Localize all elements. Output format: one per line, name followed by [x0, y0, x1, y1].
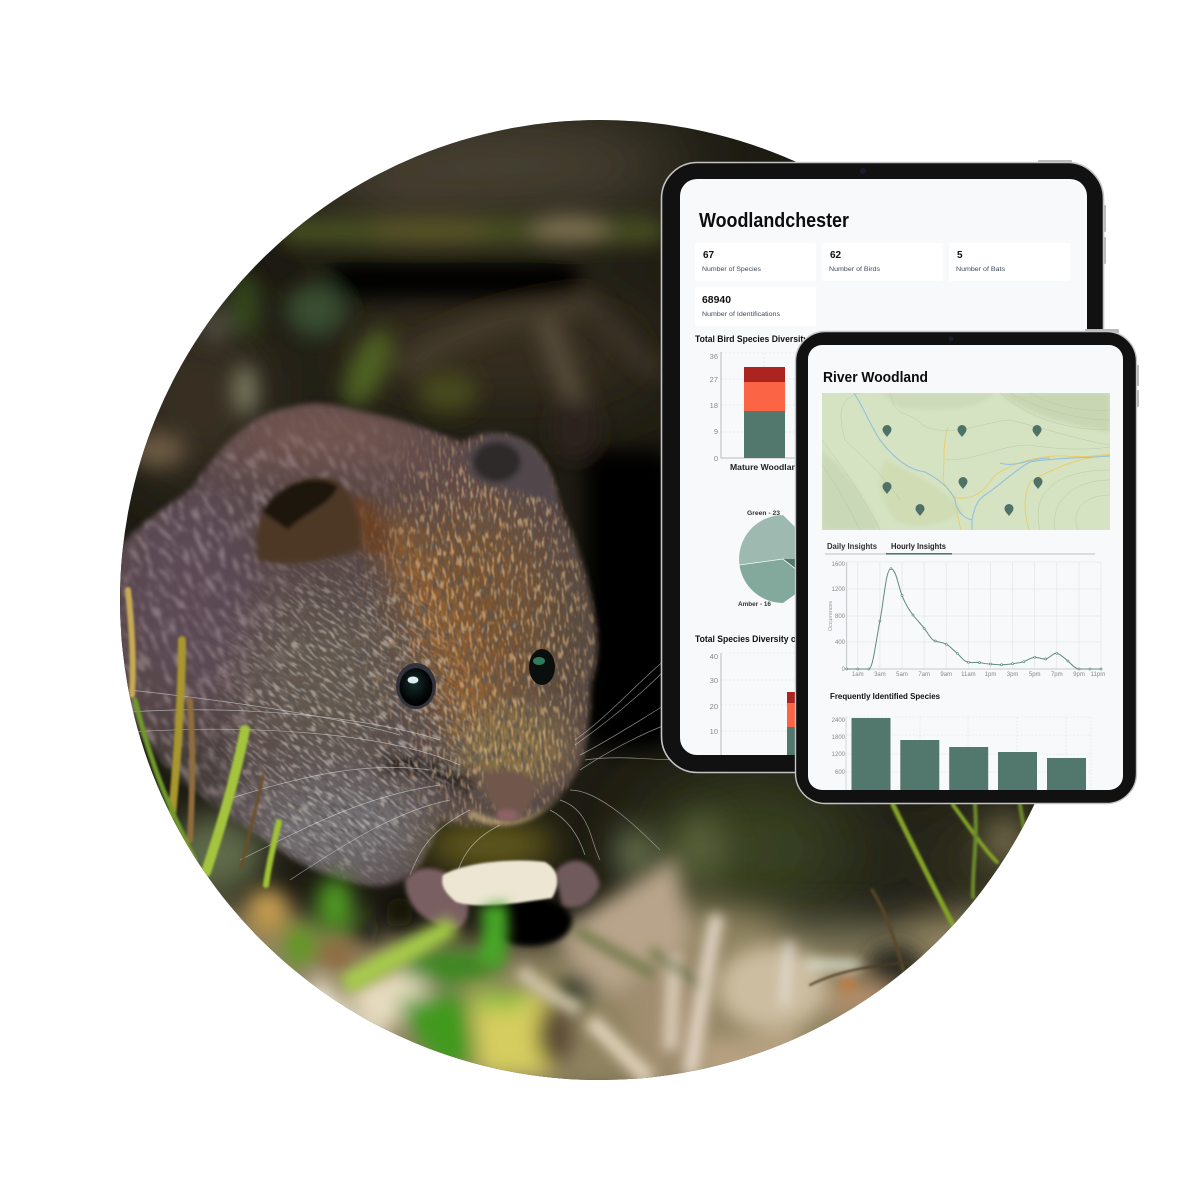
stat card: birds [830, 251, 880, 271]
line chart: hourly occurrences: 1200 [832, 587, 846, 593]
line chart: hourly occurrences: 0 [842, 667, 846, 673]
photo: bank vole in a circle [120, 120, 1034, 1080]
foreground grass and stalks [128, 590, 1025, 1080]
bar chart: frequently identified species: 600 [835, 770, 846, 776]
pie chart: species by status: Amber - 16 [738, 601, 771, 608]
bar chart: frequently identified species: 1800 [832, 735, 846, 741]
tabs: daily and hourly insights: Daily Insights [827, 542, 878, 551]
line chart: hourly occurrences: 11pm [1091, 672, 1105, 678]
mouse body [120, 400, 670, 890]
stat card: birds: Number of Birds [829, 266, 881, 273]
food and paws [405, 861, 600, 946]
stacked bar chart: bird species [710, 352, 802, 472]
stacked bar chart: all species [710, 652, 795, 755]
stat card: species [702, 251, 761, 272]
fur: cheek strands [204, 549, 485, 884]
stacked bar chart: bird species: 0 [714, 454, 718, 463]
stat card: identifications [702, 296, 780, 316]
pie chart: species by status: Green - 23 [747, 510, 780, 517]
line chart: hourly occurrences: 7pm [1051, 672, 1063, 678]
stacked bar chart: all species: 30 [710, 676, 718, 685]
background foliage, blurred [130, 123, 1040, 920]
stat card: birds: 62 [830, 250, 842, 261]
nose [482, 771, 535, 822]
line chart: hourly occurrences: 1pm [985, 672, 996, 678]
muzzle [470, 800, 565, 824]
bar chart: frequently identified species: 1200 [832, 752, 846, 758]
pie chart: species by status [738, 510, 795, 606]
near eye [396, 663, 436, 709]
line chart: hourly occurrences: 9am [940, 672, 952, 678]
foreground base: blurred leaf litter [216, 804, 1029, 1080]
stacked bar chart: bird species: 36 [710, 352, 718, 361]
stat card: bats: 5 [957, 250, 963, 261]
line chart: hourly occurrences: 3pm [1007, 672, 1018, 678]
heading: Woodlandchester: Woodlandchester [699, 210, 849, 232]
tablet side buttons [1085, 329, 1139, 407]
map with site pins [822, 393, 1110, 530]
tabs: daily and hourly insights: Hourly Insights [891, 542, 947, 551]
bar chart: frequently identified species: 2400 [832, 718, 846, 724]
stat card: bats [956, 251, 1005, 271]
stacked bar chart: all species: 10 [710, 727, 718, 736]
line chart: hourly occurrences: 1am [852, 672, 864, 678]
line chart: hourly occurrences: 7am [918, 672, 930, 678]
stacked bar chart: bird species: Mature Woodland [730, 463, 802, 472]
stat card: identifications: Number of Identifications [702, 311, 781, 318]
heading: River Woodland: River Woodland [823, 369, 928, 386]
fur: soft body [120, 426, 400, 841]
tablet: River Woodland dashboard [796, 329, 1139, 804]
far eye [529, 649, 555, 685]
heading: bird species diversity: Total Bird Species Diversity [695, 334, 809, 345]
line chart: hourly occurrences: 1600 [832, 562, 846, 568]
tabs: daily and hourly insights [825, 542, 1095, 555]
whiskers [130, 660, 680, 880]
infographic canvas [120, 120, 1139, 1080]
near ear [256, 477, 360, 564]
line chart: hourly occurrences: 400 [835, 640, 846, 646]
line chart: hourly occurrences: 9pm [1073, 672, 1085, 678]
stacked bar chart: bird species: 27 [710, 375, 718, 384]
line chart: hourly occurrences: 5am [896, 672, 908, 678]
stacked bar chart: all species: 40 [710, 652, 718, 661]
stat card: identifications: 68940 [702, 295, 731, 306]
far ear [464, 436, 556, 505]
line chart: hourly occurrences [828, 562, 1105, 678]
heading: total species diversity: Total Species Diversity of [695, 634, 800, 645]
tablet: Woodlandchester dashboard [662, 160, 1106, 772]
stat card: species: 67 [703, 250, 715, 261]
area beside and below the body [165, 815, 555, 895]
line chart: hourly occurrences: Occurrences [828, 601, 834, 631]
line chart: hourly occurrences: 800 [835, 614, 846, 620]
stacked bar chart: all species: 20 [710, 702, 718, 711]
heading: frequently identified species: Frequently Identified Species [830, 692, 941, 701]
stat card: bats: Number of Bats [956, 266, 1006, 273]
stacked bar chart: bird species: 9 [714, 427, 718, 436]
line chart: hourly occurrences: 3am [874, 672, 886, 678]
stacked bar chart: bird species: 18 [710, 401, 718, 410]
tablet side buttons [1038, 160, 1106, 264]
fur: forehead strands [346, 430, 599, 834]
line chart: hourly occurrences: 5pm [1029, 672, 1041, 678]
bar chart: frequently identified species [832, 717, 1091, 792]
stat card: species: Number of Species [702, 266, 762, 273]
line chart: hourly occurrences: 11am [961, 672, 976, 678]
